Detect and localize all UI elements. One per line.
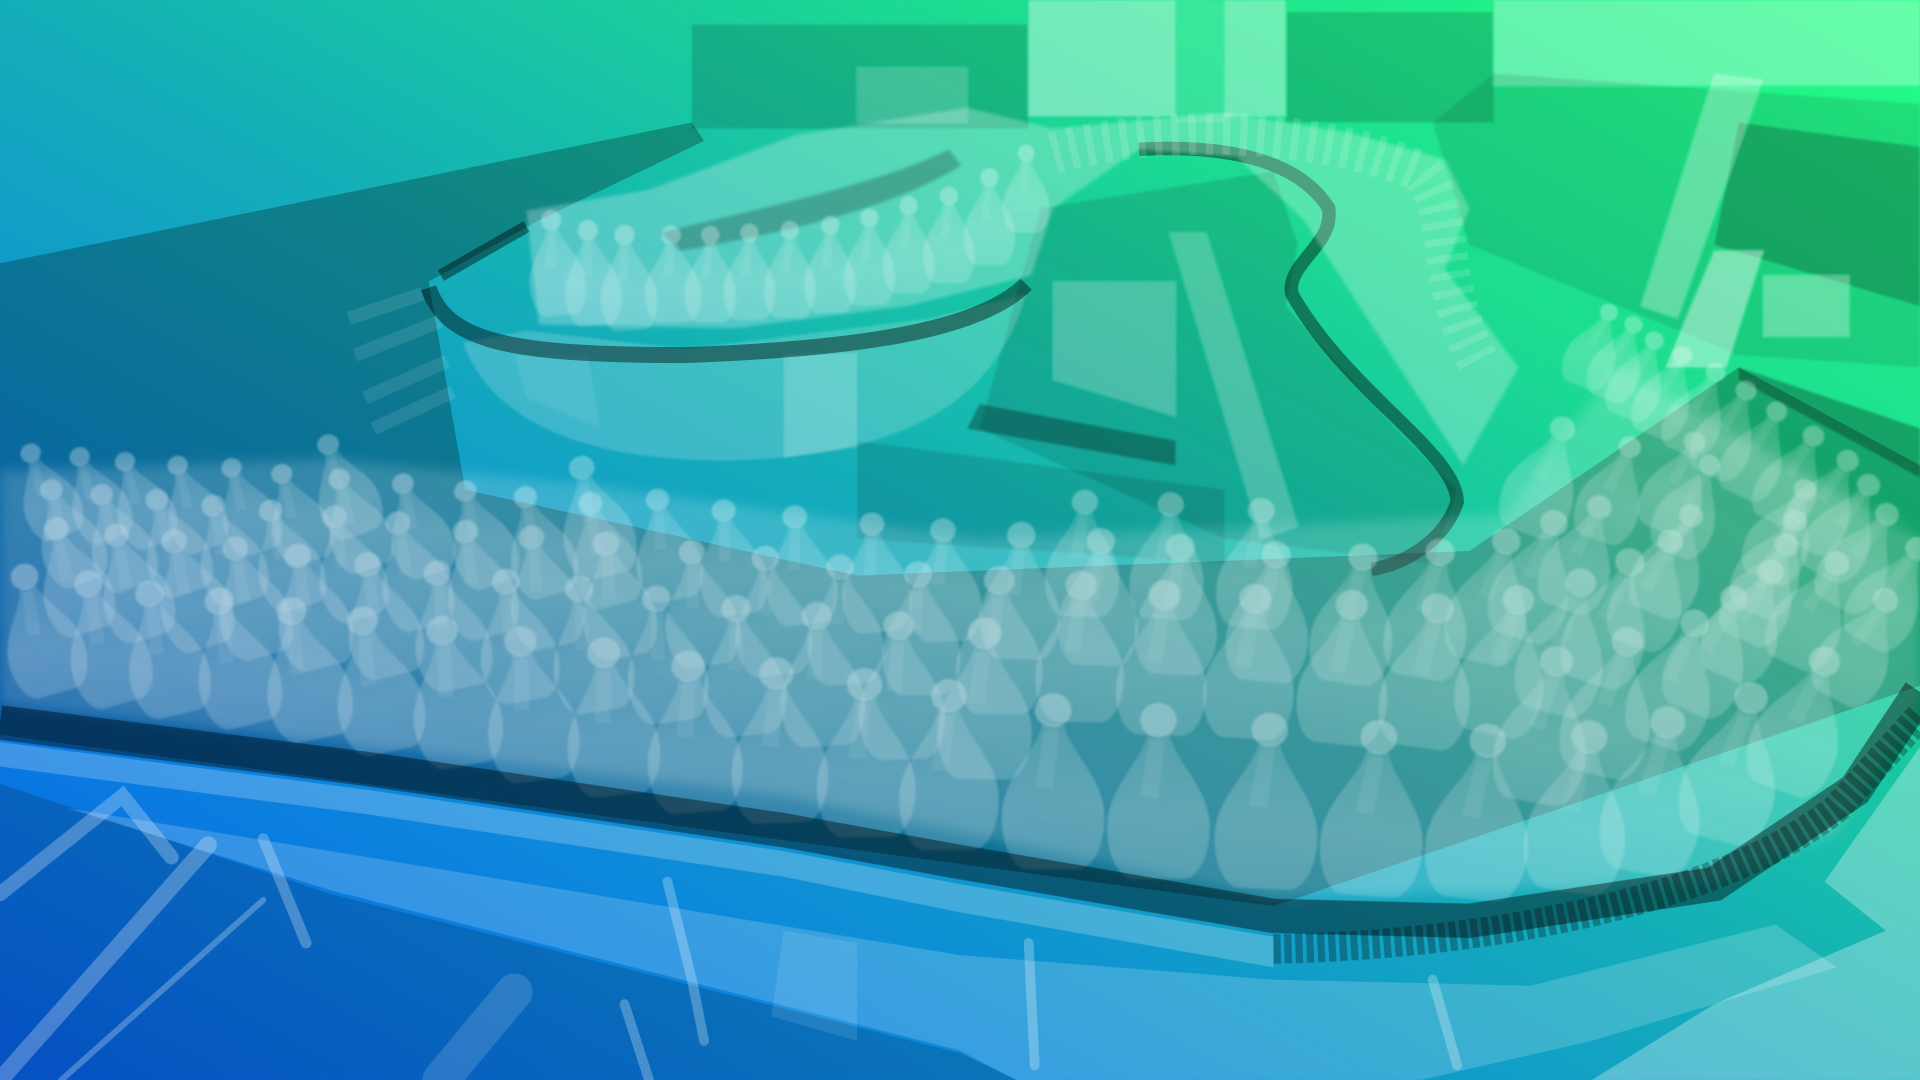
struts [0,796,1457,1080]
dark rail under bottles [0,692,1920,921]
steel cylinder of upper conveyor [463,294,1026,461]
pipes on left floor [349,294,453,429]
dark gap of back loop [661,149,961,251]
scaffold under conveyor [857,171,1457,563]
floor lower left [0,784,1016,1080]
curved chain belt [1273,716,1920,949]
dark belts of upper conveyor [429,148,1457,569]
light top rail [0,742,1273,967]
texture of small bottles on S bend [1053,134,1482,367]
metal side panel [67,808,1837,1080]
back machinery [692,0,1920,478]
bottles [0,295,1920,905]
crowd of bottles base [0,367,1920,900]
floor and back wall shadow [0,122,1920,906]
upper conveyor bottles band [527,108,1518,465]
small bottles on upper loop [522,144,1049,332]
light floor lower right [1592,747,1920,1080]
